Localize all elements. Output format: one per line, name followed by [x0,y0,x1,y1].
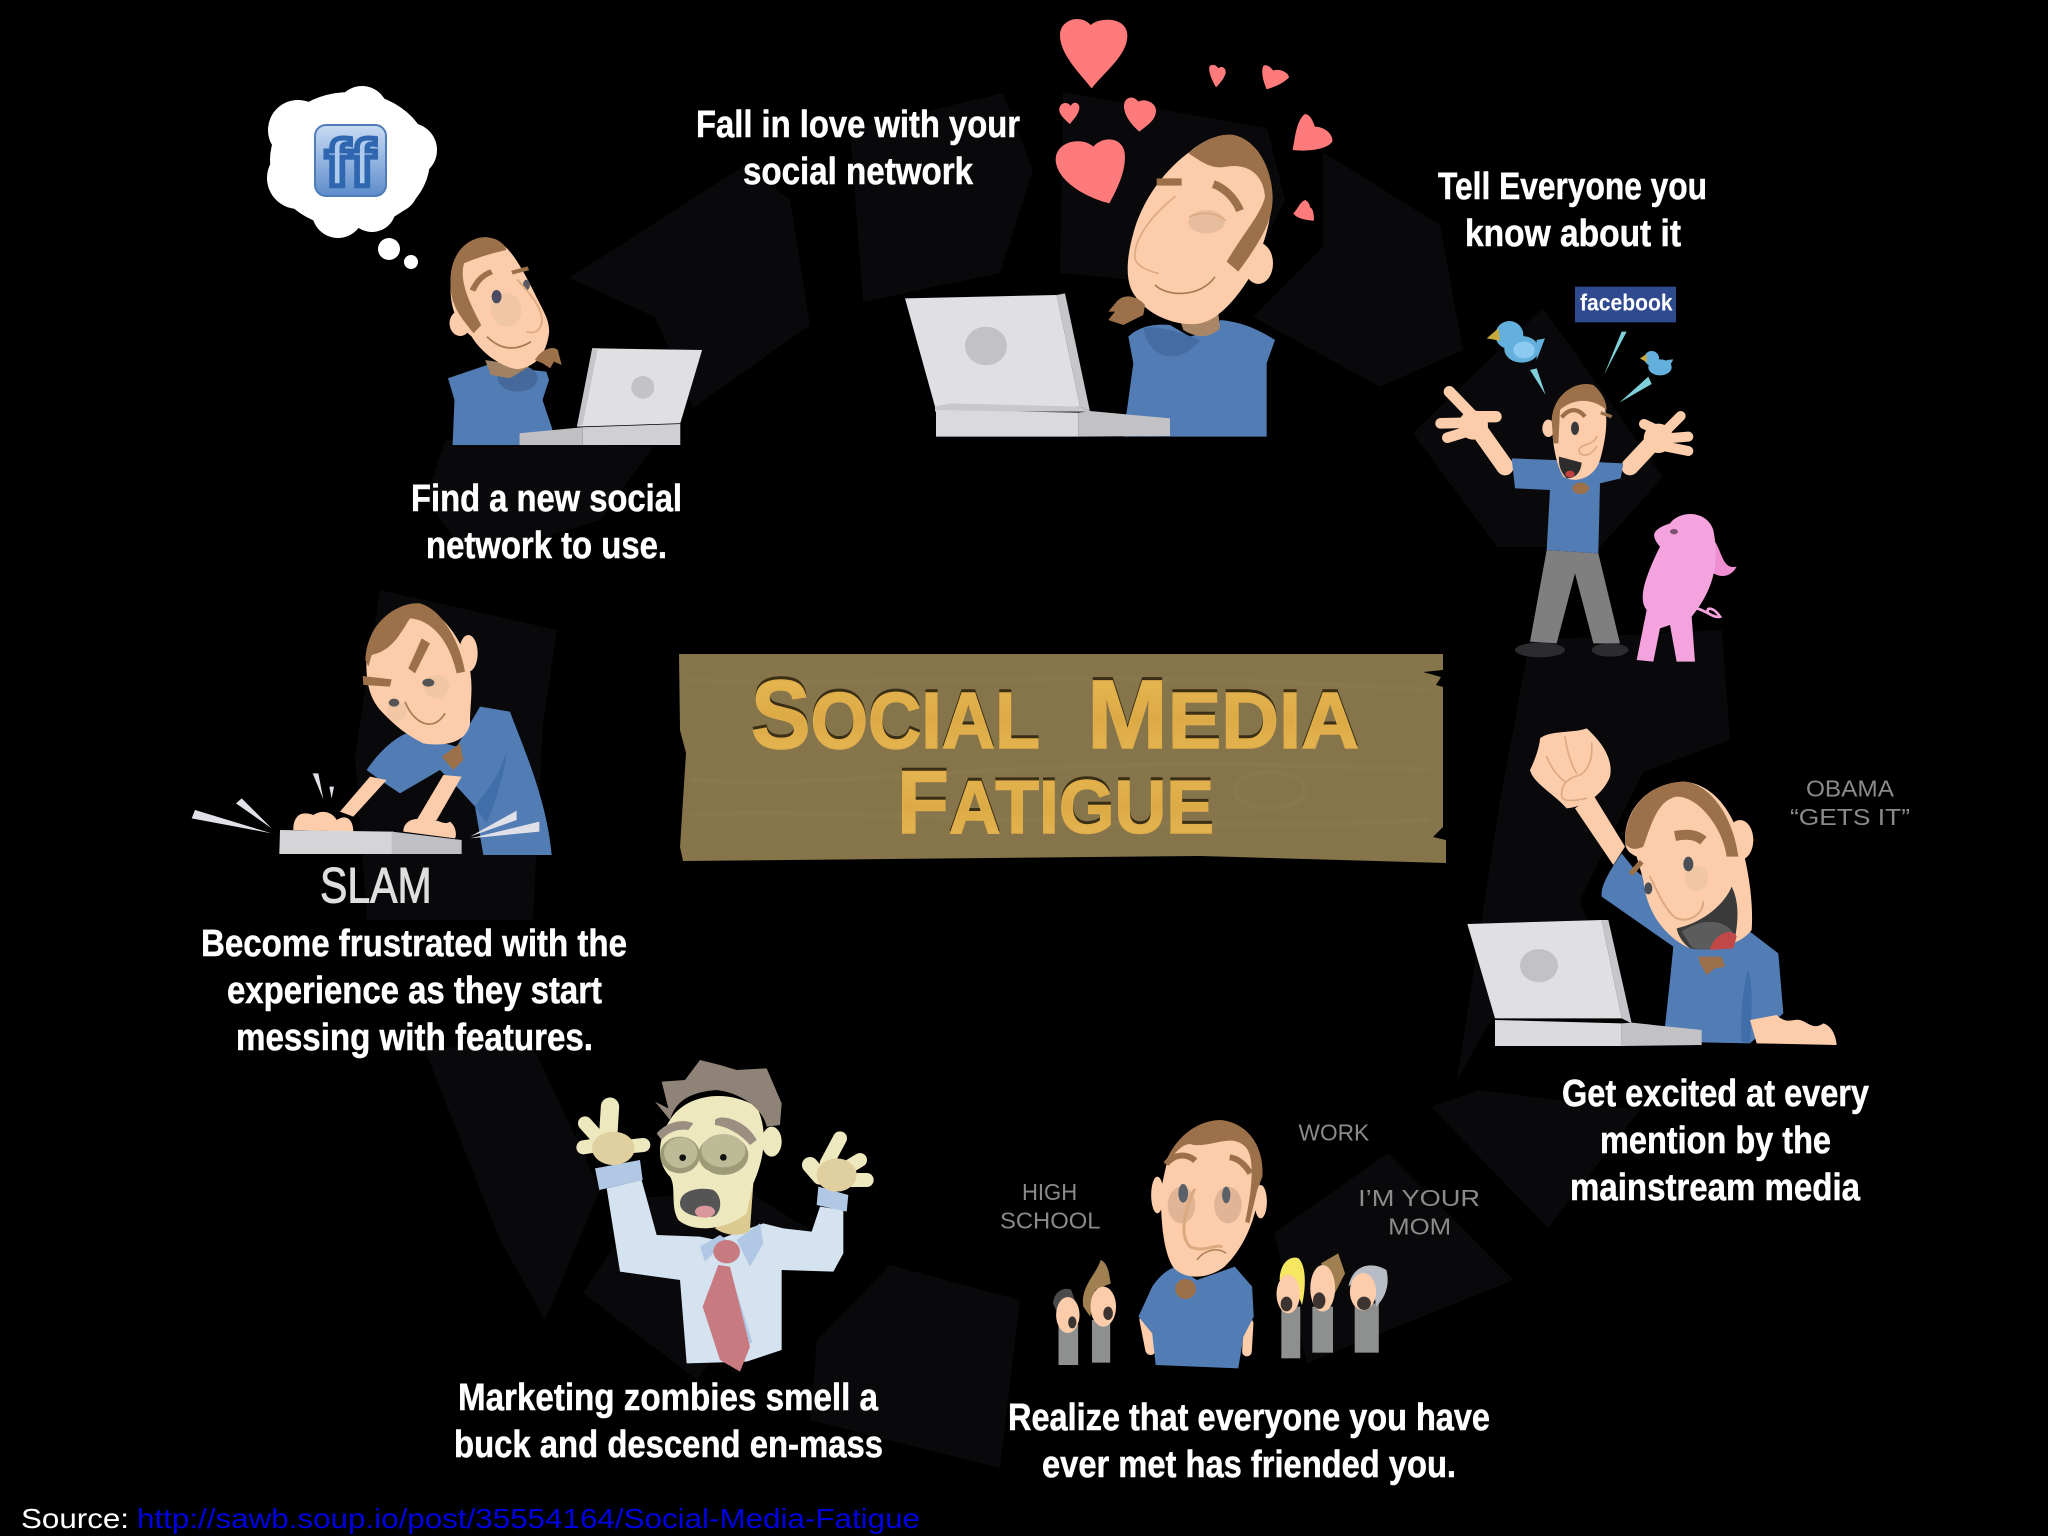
thought cloud [267,86,437,269]
caption [454,1377,883,1466]
man [1441,384,1688,657]
label: obama gets it [1790,776,1910,830]
caption: network to use. [426,525,667,567]
hearts [1056,19,1332,221]
figure: man cheering at laptop [1467,728,1910,1046]
title text: MEDIA [1087,660,1359,769]
caption: Find a new social [411,478,682,520]
figure: man with facebook, twitter and pig [1441,287,1737,662]
source line: Source: [21,1503,129,1534]
caption: ever met has friended you. [1042,1444,1456,1486]
caption: messing with features. [236,1017,593,1059]
figure: sad man and friends [1000,1120,1480,1368]
figure: man slamming laptop [192,603,552,914]
pink pig [1637,514,1737,662]
work and family friends [1277,1253,1388,1358]
caption [201,923,627,1059]
figure: man in love with hearts [905,19,1332,437]
caption [1562,1073,1869,1209]
caption: Tell Everyone you [1438,166,1707,208]
facebook badge [1575,287,1676,322]
caption: Become frustrated with the [201,923,627,965]
caption: buck and descend en-mass [454,1424,883,1466]
group labels: I’M YOUR [1358,1185,1480,1211]
caption: mainstream media [1570,1167,1861,1209]
group labels: MOM [1388,1214,1451,1239]
title text: SOCIAL [751,660,1040,769]
step 3: tell everyone [1438,166,1737,662]
step 4: get excited [1467,728,1910,1209]
caption: Fall in love with your [696,104,1020,146]
step 1: find a new social network [267,86,702,567]
figure: zombie marketer [583,1060,867,1372]
group labels [1000,1120,1480,1239]
label: obama gets it: “GETS IT” [1790,804,1910,830]
figure: man with laptop [448,237,702,445]
source line: http://sawb.soup.io/post/35554164/Social-Media-Fatigue [137,1503,920,1534]
icon: friendfeed [315,125,386,200]
step 5: everyone friended you [1000,1120,1490,1486]
facebook badge: facebook [1580,290,1673,316]
caption [411,478,682,567]
caption: Marketing zombies smell a [458,1377,879,1419]
slam text: SLAM [320,858,432,914]
step 2: fall in love [696,19,1332,437]
caption: Get excited at every [1562,1073,1869,1115]
title text [751,660,1359,852]
caption [696,104,1020,193]
icon: friendfeed: ff [325,126,376,200]
caption [1008,1397,1490,1486]
twitter birds [1487,321,1673,375]
main man [1138,1120,1267,1368]
impact lines [192,773,539,838]
caption: social network [743,151,974,193]
step 6: marketing zombies [454,1060,883,1466]
wood plank [679,654,1446,863]
group labels: HIGH [1022,1179,1077,1205]
signal spikes [1530,332,1652,403]
group labels: WORK [1299,1120,1370,1146]
high school friends [1053,1260,1116,1365]
caption [1438,166,1707,255]
step 7: become frustrated [192,603,627,1059]
caption: experience as they start [227,970,602,1012]
caption: mention by the [1600,1120,1831,1162]
label: obama gets it: OBAMA [1806,776,1895,802]
title text: FATIGUE [897,752,1214,852]
group labels: SCHOOL [1000,1208,1101,1233]
sign: wooden title board [679,654,1446,863]
caption: Realize that everyone you have [1008,1397,1490,1439]
caption: know about it [1465,213,1681,255]
